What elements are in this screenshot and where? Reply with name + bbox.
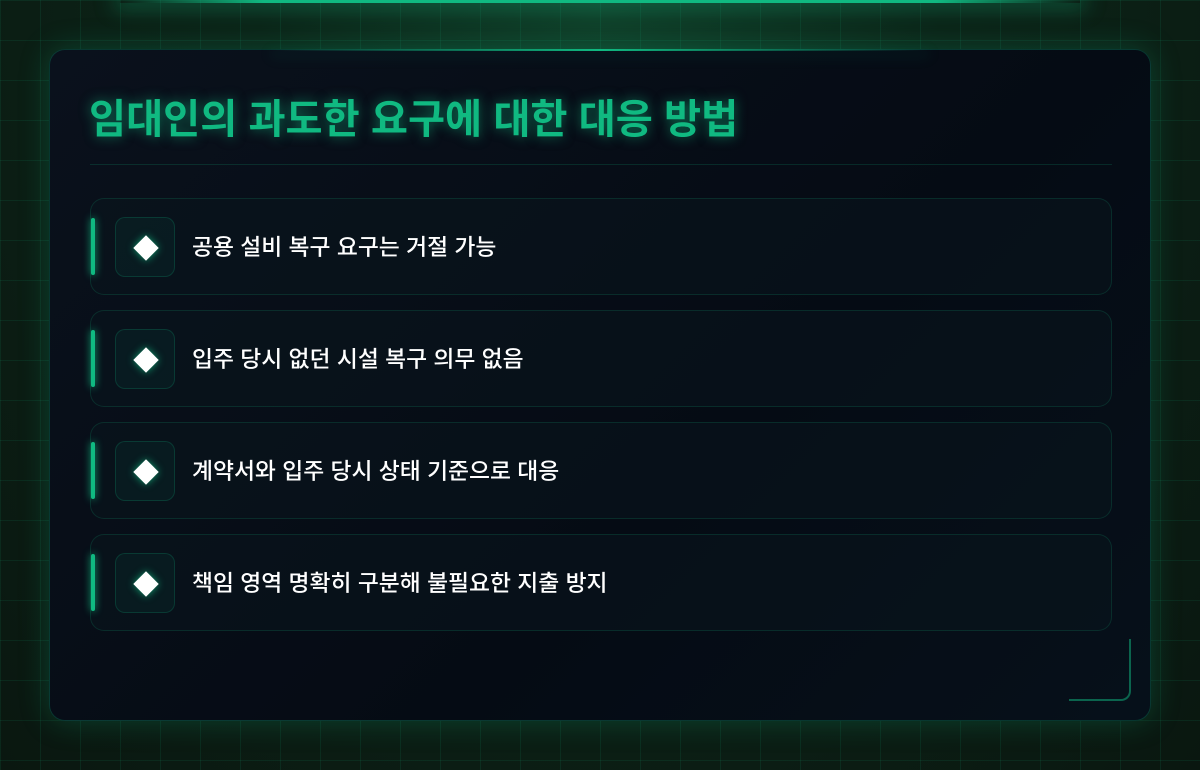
icon: diamond — [115, 553, 175, 613]
corner bracket — [1069, 639, 1131, 701]
text 1: 공용 설비 복구 요구는 거절 가능 — [192, 234, 496, 260]
item 4 — [90, 534, 1112, 631]
text 3: 계약서와 입주 당시 상태 기준으로 대응 — [192, 458, 559, 484]
item 3 — [90, 422, 1112, 519]
text 2: 입주 당시 없던 시설 복구 의무 없음 — [192, 346, 524, 372]
icon: diamond — [115, 329, 175, 389]
title: 임대인의 과도한 요구에 대한 대응 방법 — [89, 97, 738, 142]
text 4: 책임 영역 명확히 구분해 불필요한 지출 방지 — [192, 570, 608, 596]
icon: diamond — [115, 217, 175, 277]
icon: diamond — [115, 441, 175, 501]
item 2 — [90, 310, 1112, 407]
item 1 — [90, 198, 1112, 295]
